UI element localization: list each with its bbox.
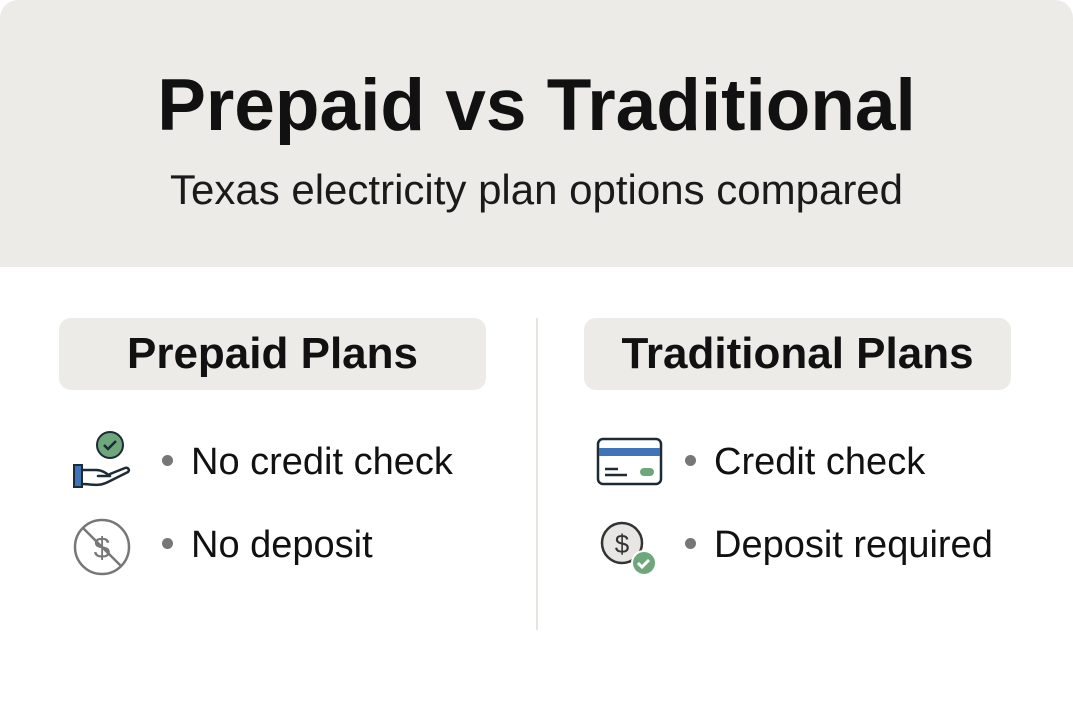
- row: credit check: Credit check: [714, 441, 925, 483]
- row: deposit required: Deposit required: [714, 524, 993, 566]
- panel heading: prepaid: Prepaid Plans: [127, 329, 418, 378]
- panel heading: prepaid: [59, 318, 486, 390]
- header band: [0, 0, 1073, 267]
- panel heading: traditional: Traditional Plans: [621, 329, 974, 378]
- icon: no dollar: [74, 518, 130, 576]
- icon: hand with check: [73, 431, 130, 488]
- divider: [536, 318, 538, 630]
- icon: credit card: [596, 438, 662, 486]
- icon: dollar with check: $: [615, 529, 630, 559]
- panel heading: traditional: [584, 318, 1011, 390]
- row: no credit check: No credit check: [191, 441, 453, 483]
- title: Prepaid vs Traditional: [157, 65, 916, 146]
- subtitle: Texas electricity plan options compared: [170, 166, 903, 213]
- icon: no dollar: $: [94, 532, 111, 565]
- icon: dollar with check: [600, 522, 655, 574]
- row: no deposit: No deposit: [191, 524, 373, 566]
